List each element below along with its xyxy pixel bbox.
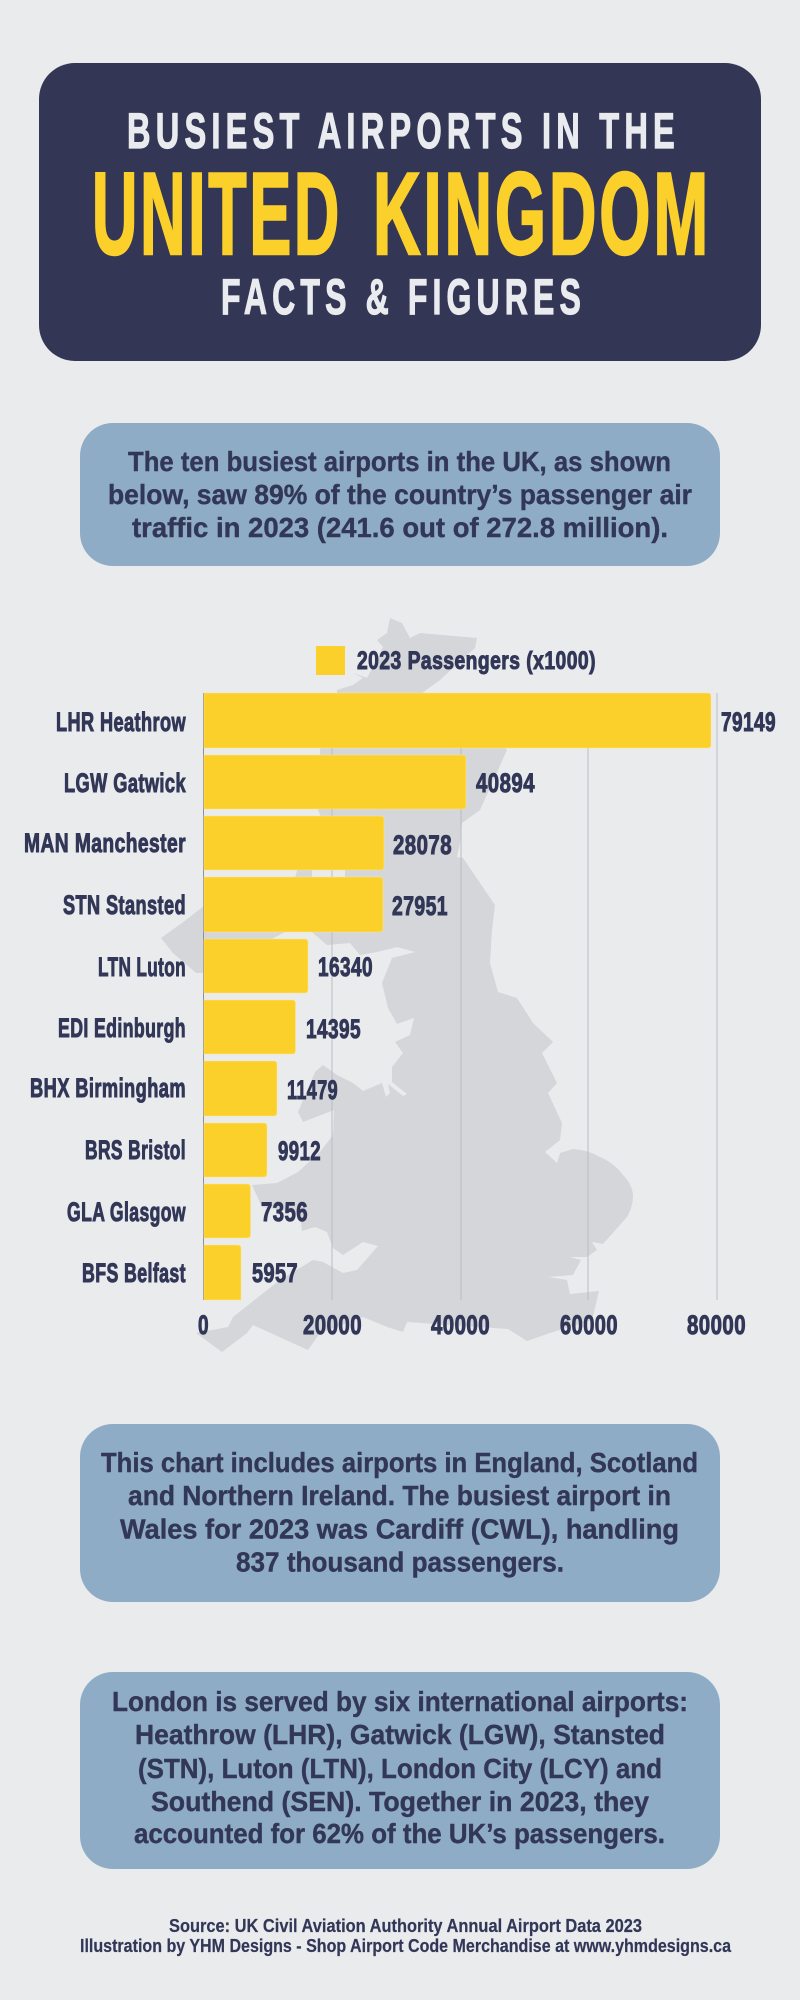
legend: 2023 Passengers (x1000)	[357, 647, 596, 675]
panel: intro text: traffic in 2023 (241.6 out of 272.8 million).	[132, 512, 668, 543]
airport labels: STN Stansted	[63, 890, 186, 920]
bar values: 5957	[252, 1258, 298, 1288]
panel: intro text: below, saw 89% of the country’s passenger air	[108, 479, 692, 510]
panel: London airports note: Southend (SEN). Together in 2023, they	[151, 1786, 649, 1817]
airport labels: EDI Edinburgh	[58, 1013, 186, 1043]
bar values: 9912	[278, 1136, 321, 1166]
panel: London airports note: Heathrow (LHR), Gatwick (LGW), Stansted	[135, 1719, 665, 1750]
heading: united kingdom: UNITED	[92, 148, 342, 279]
footer: source and credit: Source: UK Civil Aviation Authority Annual Airport Data 2023	[169, 1916, 642, 1936]
bar values: 27951	[392, 891, 448, 921]
legend	[316, 646, 596, 675]
airport labels: LTN Luton	[98, 952, 186, 982]
x-axis tick labels	[198, 1310, 746, 1340]
bar values: 16340	[318, 952, 373, 982]
panel: intro text	[80, 423, 720, 566]
bar values: 79149	[721, 707, 776, 737]
x-axis tick labels: 60000	[560, 1310, 618, 1340]
heading: facts and figures: FACTS & FIGURES	[221, 269, 586, 325]
footer: source and credit: Illustration by YHM Designs - Shop Airport Code Merchandise at www.yhmdesigns.ca	[80, 1936, 732, 1956]
panel: London airports note: London is served by six international airports:	[112, 1686, 688, 1717]
bar chart: 2023 passengers by airport	[24, 618, 776, 1352]
x-axis tick labels: 0	[198, 1310, 209, 1340]
airport labels: MAN Manchester	[24, 828, 186, 858]
x-axis tick labels: 40000	[431, 1310, 490, 1340]
airport labels: BHX Birmingham	[30, 1073, 186, 1103]
panel: chart coverage note	[80, 1424, 720, 1602]
bar values: 7356	[261, 1197, 308, 1227]
panel: chart coverage note: and Northern Ireland. The busiest airport in	[128, 1480, 671, 1511]
airport labels	[24, 707, 186, 1288]
bar values: 11479	[287, 1075, 338, 1105]
bar values: 28078	[393, 830, 452, 860]
bar values: 14395	[306, 1014, 361, 1044]
panel: intro text: The ten busiest airports in the UK, as shown	[128, 446, 671, 477]
airport labels: LGW Gatwick	[64, 768, 186, 798]
airport labels: LHR Heathrow	[56, 707, 186, 737]
panel: chart coverage note: Wales for 2023 was Cardiff (CWL), handling	[120, 1514, 679, 1544]
x-axis tick labels: 80000	[687, 1310, 746, 1340]
gridlines and axis	[204, 693, 717, 1300]
illustration: UK map silhouette	[161, 618, 633, 1352]
airport labels: BRS Bristol	[85, 1135, 186, 1165]
bar values: 40894	[476, 768, 535, 798]
panel: London airports note: accounted for 62% of the UK’s passengers.	[134, 1818, 665, 1849]
panel: chart coverage note: This chart includes airports in England, Scotland	[101, 1447, 698, 1478]
panel: London airports note: (STN), Luton (LTN), London City (LCY) and	[138, 1753, 662, 1784]
x-axis tick labels: 20000	[303, 1310, 362, 1340]
airport labels: GLA Glasgow	[67, 1197, 186, 1227]
airport labels: BFS Belfast	[82, 1258, 186, 1288]
panel: chart coverage note: 837 thousand passengers.	[236, 1546, 564, 1578]
bar values	[252, 707, 776, 1288]
footer: source and credit	[80, 1916, 732, 1956]
panel: title header	[39, 63, 761, 361]
bars	[204, 693, 711, 1300]
panel: London airports note	[80, 1672, 720, 1869]
